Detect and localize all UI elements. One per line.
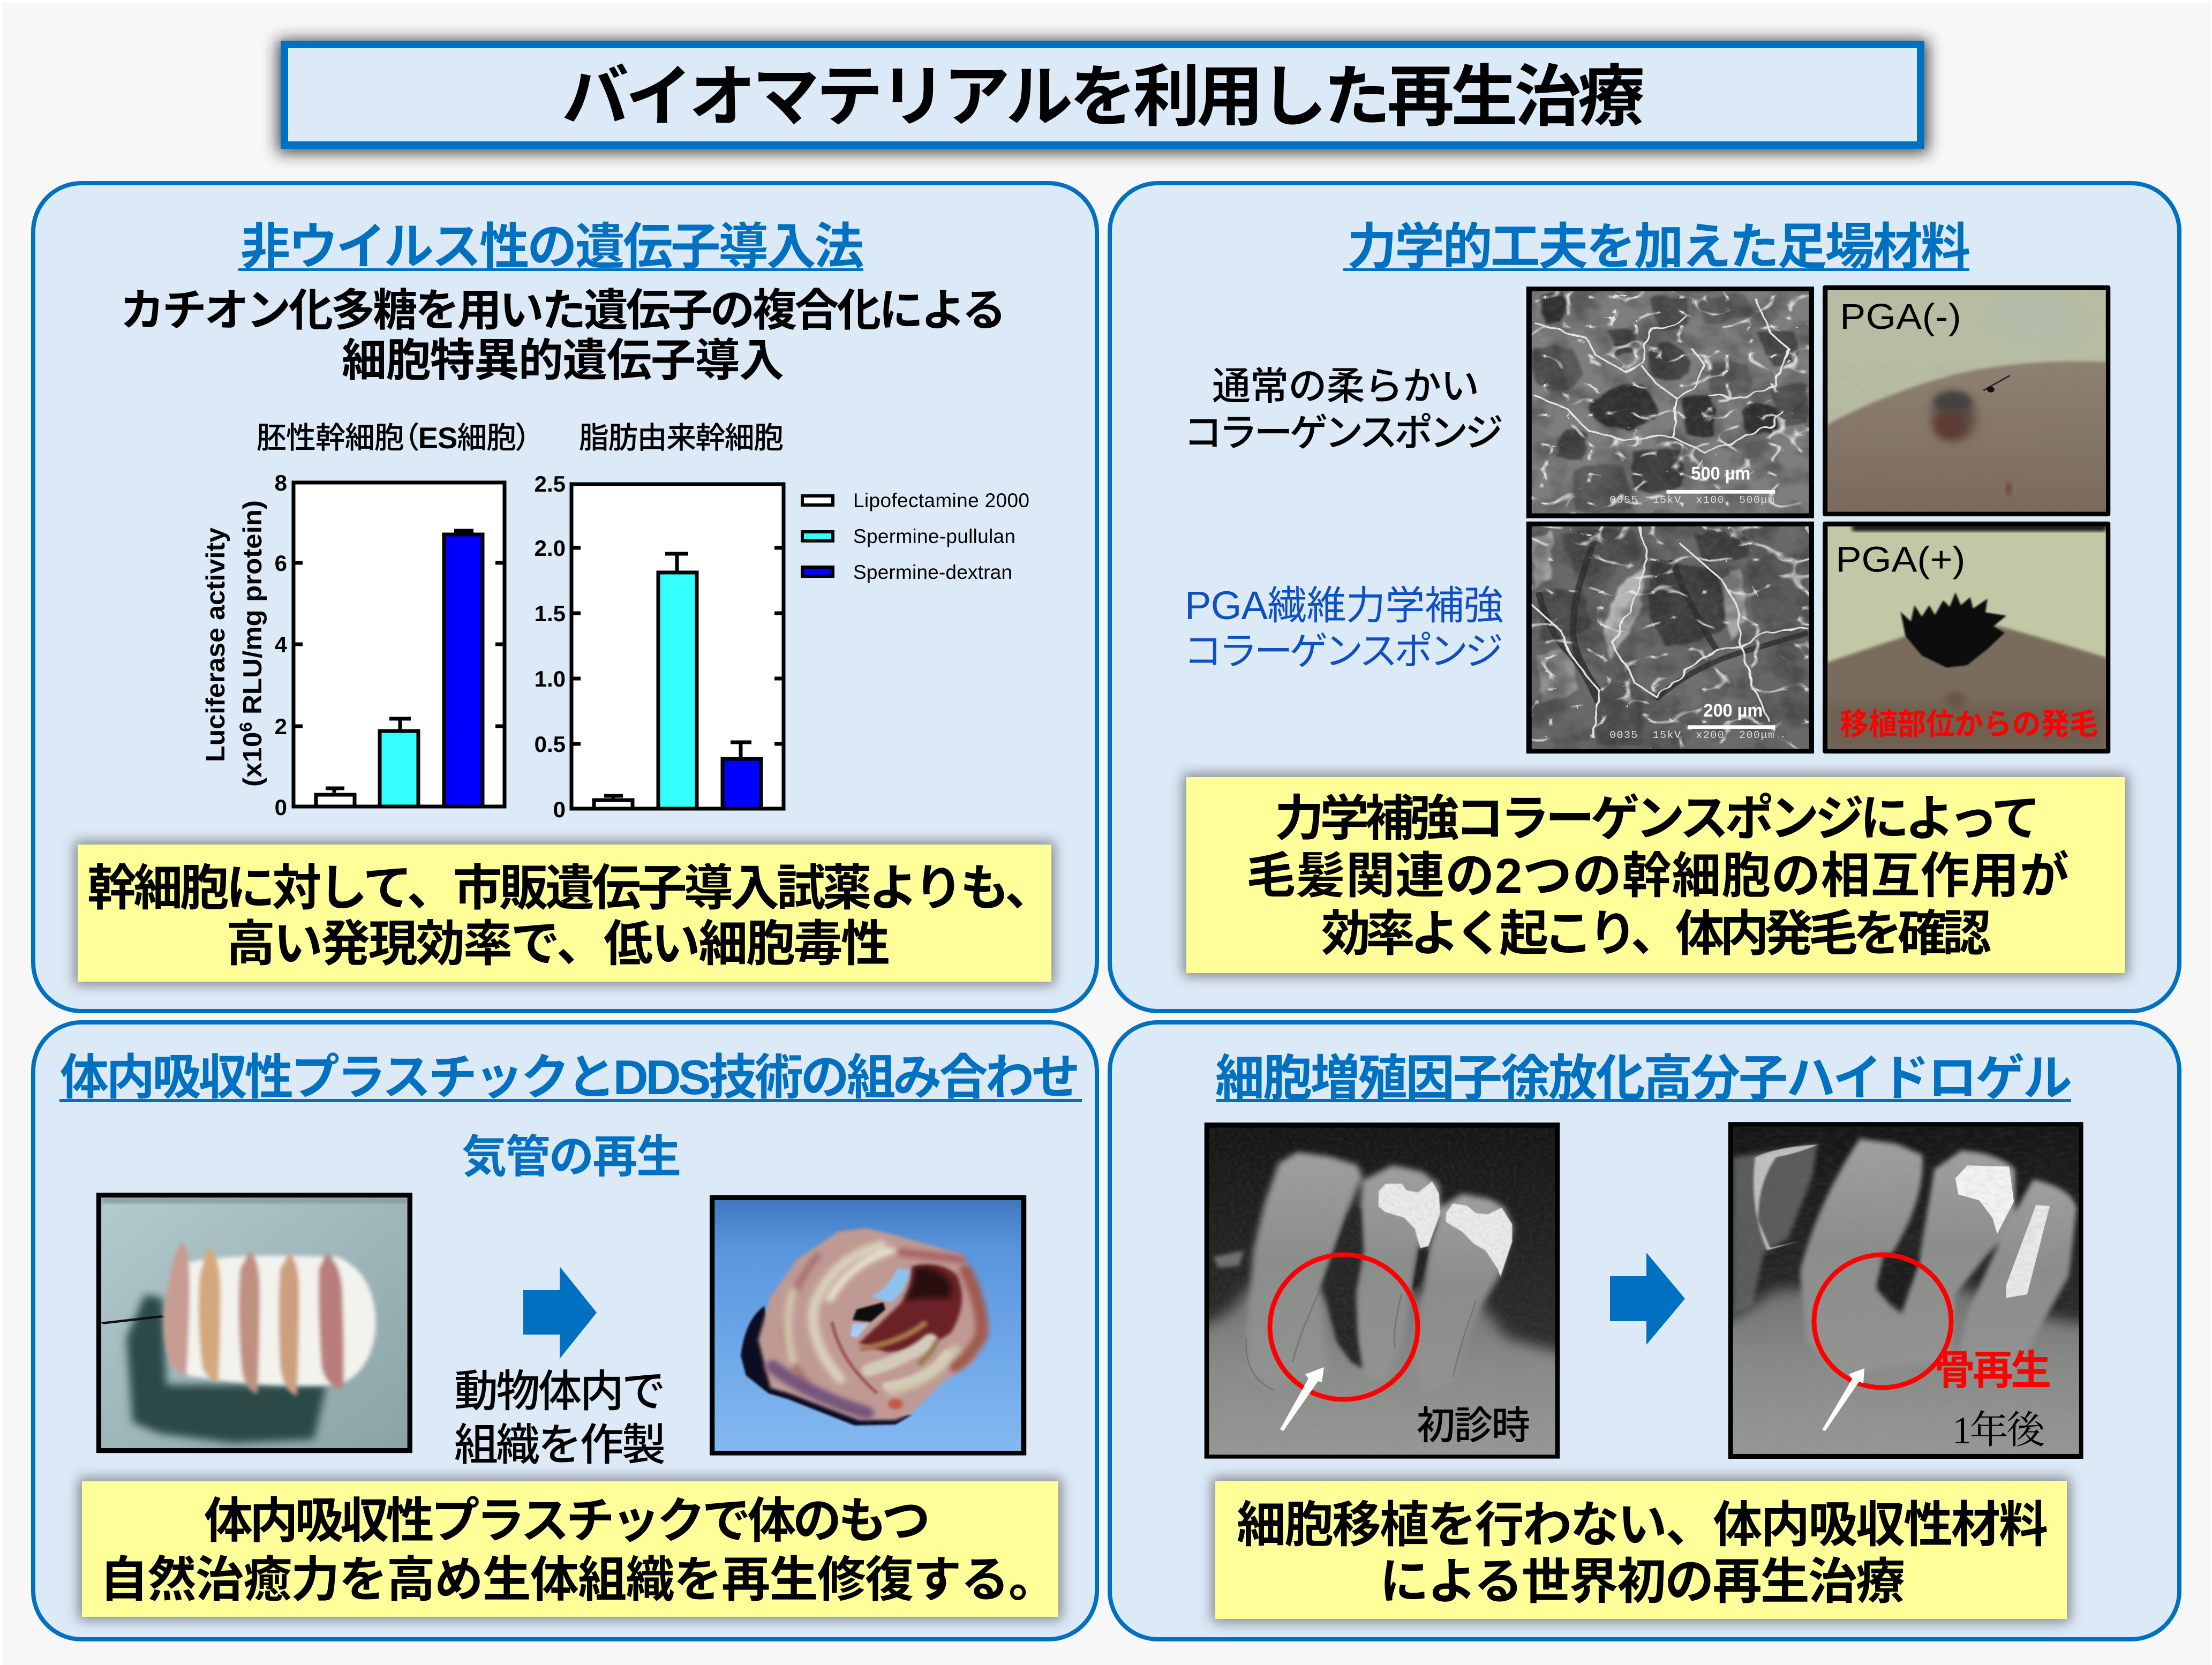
plot: adipose stem cells: 0	[553, 797, 566, 822]
title: バイオマテリアルを利用した再生治療	[562, 60, 1645, 134]
scale bar: 500 um	[1609, 463, 1775, 506]
plot: ES cells: 4	[275, 632, 288, 657]
plot: adipose stem cells	[535, 471, 784, 822]
scale bar: 200 um: 200 µm	[1703, 700, 1763, 721]
marker: red circle	[1814, 1255, 1951, 1388]
photo: PGA plus	[1823, 522, 2110, 754]
plot: ES cells: 8	[275, 470, 287, 495]
subheading: カチオン化多糖を用いた遺伝子の複合化による	[120, 285, 1006, 335]
photo: x-ray after one year	[1692, 1122, 2135, 1492]
label: conventional sponge: コラーゲンスポンジ	[1184, 412, 1503, 455]
scale bar: 500 um: 500 µm	[1691, 463, 1750, 484]
heading: plastic and DDS: 体内吸収性プラスチックとDDS技術の組み合わせ	[60, 1051, 1080, 1105]
label: PGA(+): PGA(+)	[1836, 539, 1965, 579]
title	[277, 40, 1928, 153]
scale bar: 500 um: 0055 15kV x100 500μm	[1609, 494, 1774, 506]
marker: red circle	[1270, 1255, 1418, 1399]
callout: trachea result: 自然治癒力を高め生体組織を再生修復する。	[100, 1553, 1057, 1607]
plot: ES cells	[275, 470, 505, 820]
callout: hydrogel result: 細胞移植を行わない、体内吸収性材料	[1237, 1498, 2048, 1553]
callout: hair growth result: 力学補強コラーゲンスポンジによって	[1275, 792, 2041, 846]
label: PGA reinforced sponge	[1184, 583, 1503, 673]
photos: scaffold grid	[1526, 285, 2110, 754]
label: PGA reinforced sponge: PGA繊維力学補強	[1185, 583, 1503, 628]
arrow: implantation	[523, 1267, 597, 1359]
label: hair growth: 移植部位からの発毛	[1840, 708, 2098, 741]
y axis title: Luciferase activity	[201, 528, 230, 762]
scale bar: 200 um	[1609, 700, 1775, 741]
plot: adipose stem cells: 0.5	[535, 732, 566, 757]
arrow: white	[1280, 1367, 1324, 1431]
heading: scaffold: 力学的工夫を加えた足場材料	[1347, 219, 1970, 275]
subheading: 細胞特異的遺伝子導入	[342, 335, 784, 386]
plot: adipose stem cells: 2.5	[535, 471, 566, 496]
callout: hydrogel result	[1212, 1478, 2070, 1622]
heading: hydrogel: 細胞増殖因子徐放化高分子ハイドロゲル	[1215, 1051, 2072, 1106]
photo: SEM PGA reinforced sponge	[1526, 522, 1814, 754]
caption: made in animal body: 組織を作製	[454, 1421, 666, 1470]
y axis title: RLU/mg protein)	[238, 500, 267, 722]
plot: adipose stem cells: 2.0	[535, 536, 566, 561]
label: bone regeneration: 骨再生	[1935, 1348, 2051, 1393]
panel: growth factor hydrogel	[1110, 1022, 2179, 1639]
scale bar: 200 um: 0035 15kV x200 200μm	[1609, 729, 1774, 741]
y axis title: (x10	[238, 734, 267, 787]
plot: ES cells: 0	[275, 795, 287, 820]
callout: stem cell result	[74, 841, 1055, 985]
subheading	[120, 285, 1006, 386]
arrow: progression	[1610, 1253, 1685, 1345]
plot: ES cells: 2	[275, 714, 287, 739]
label: PGA(-): PGA(-)	[1840, 296, 1961, 336]
caption: made in animal body	[454, 1367, 666, 1470]
caption: made in animal body: 動物体内で	[454, 1367, 666, 1416]
bar chart: luciferase activity	[201, 421, 1029, 822]
callout: hair growth result: 毛髪関連の2つの幹細胞の相互作用が	[1246, 849, 2069, 903]
photo: PGA minus	[1823, 285, 2110, 516]
legend: Spermine-dextran	[853, 561, 1012, 583]
callout: stem cell result: 幹細胞に対して、市販遺伝子導入試薬よりも、	[87, 861, 1054, 916]
legend: Spermine-pullulan	[853, 525, 1015, 547]
callout: hydrogel result: による世界初の再生治療	[1380, 1555, 1905, 1609]
panel: bioabsorbable plastic and DDS	[33, 1022, 1097, 1639]
label: first visit: 初診時	[1417, 1405, 1530, 1448]
photo: x-ray first visit	[1177, 1122, 1594, 1491]
chart title: ES cells: 胚性幹細胞（ES細胞）	[257, 421, 531, 455]
callout: stem cell result: 高い発現効率で、低い細胞毒性	[226, 917, 890, 971]
plot: adipose stem cells: 1.0	[535, 666, 566, 691]
subheading: trachea regeneration: 気管の再生	[462, 1132, 681, 1182]
y axis title	[201, 500, 267, 787]
photo: coil scaffold	[96, 1193, 412, 1453]
callout: hair growth result: 効率よく起こり、体内発毛を確認	[1321, 907, 1991, 961]
panel: non-viral gene delivery	[33, 183, 1097, 1011]
plot: adipose stem cells: 1.5	[535, 601, 566, 626]
heading: non-viral gene delivery: 非ウイルス性の遺伝子導入法	[240, 219, 864, 275]
legend: Lipofectamine 2000	[853, 489, 1029, 511]
legend	[802, 489, 1029, 583]
chart title: adipose stem cells: 脂肪由来幹細胞	[579, 421, 784, 455]
label: one year later: 1年後	[1952, 1409, 2045, 1452]
plot: ES cells: 6	[275, 551, 287, 576]
arrow: white	[1822, 1368, 1864, 1431]
callout: trachea result	[79, 1478, 1062, 1620]
callout: hair growth result	[1183, 774, 2128, 976]
label: PGA reinforced sponge: コラーゲンスポンジ	[1184, 630, 1503, 673]
callout: trachea result: 体内吸収性プラスチックで体のもつ	[204, 1494, 930, 1548]
photo: SEM conventional sponge	[1526, 287, 1814, 518]
label: conventional sponge	[1184, 365, 1503, 455]
panel: mechanically engineered scaffold	[1110, 183, 2179, 1011]
photo: regenerated trachea	[710, 1195, 1026, 1456]
label: conventional sponge: 通常の柔らかい	[1212, 365, 1479, 408]
y axis title: 6	[236, 722, 255, 732]
